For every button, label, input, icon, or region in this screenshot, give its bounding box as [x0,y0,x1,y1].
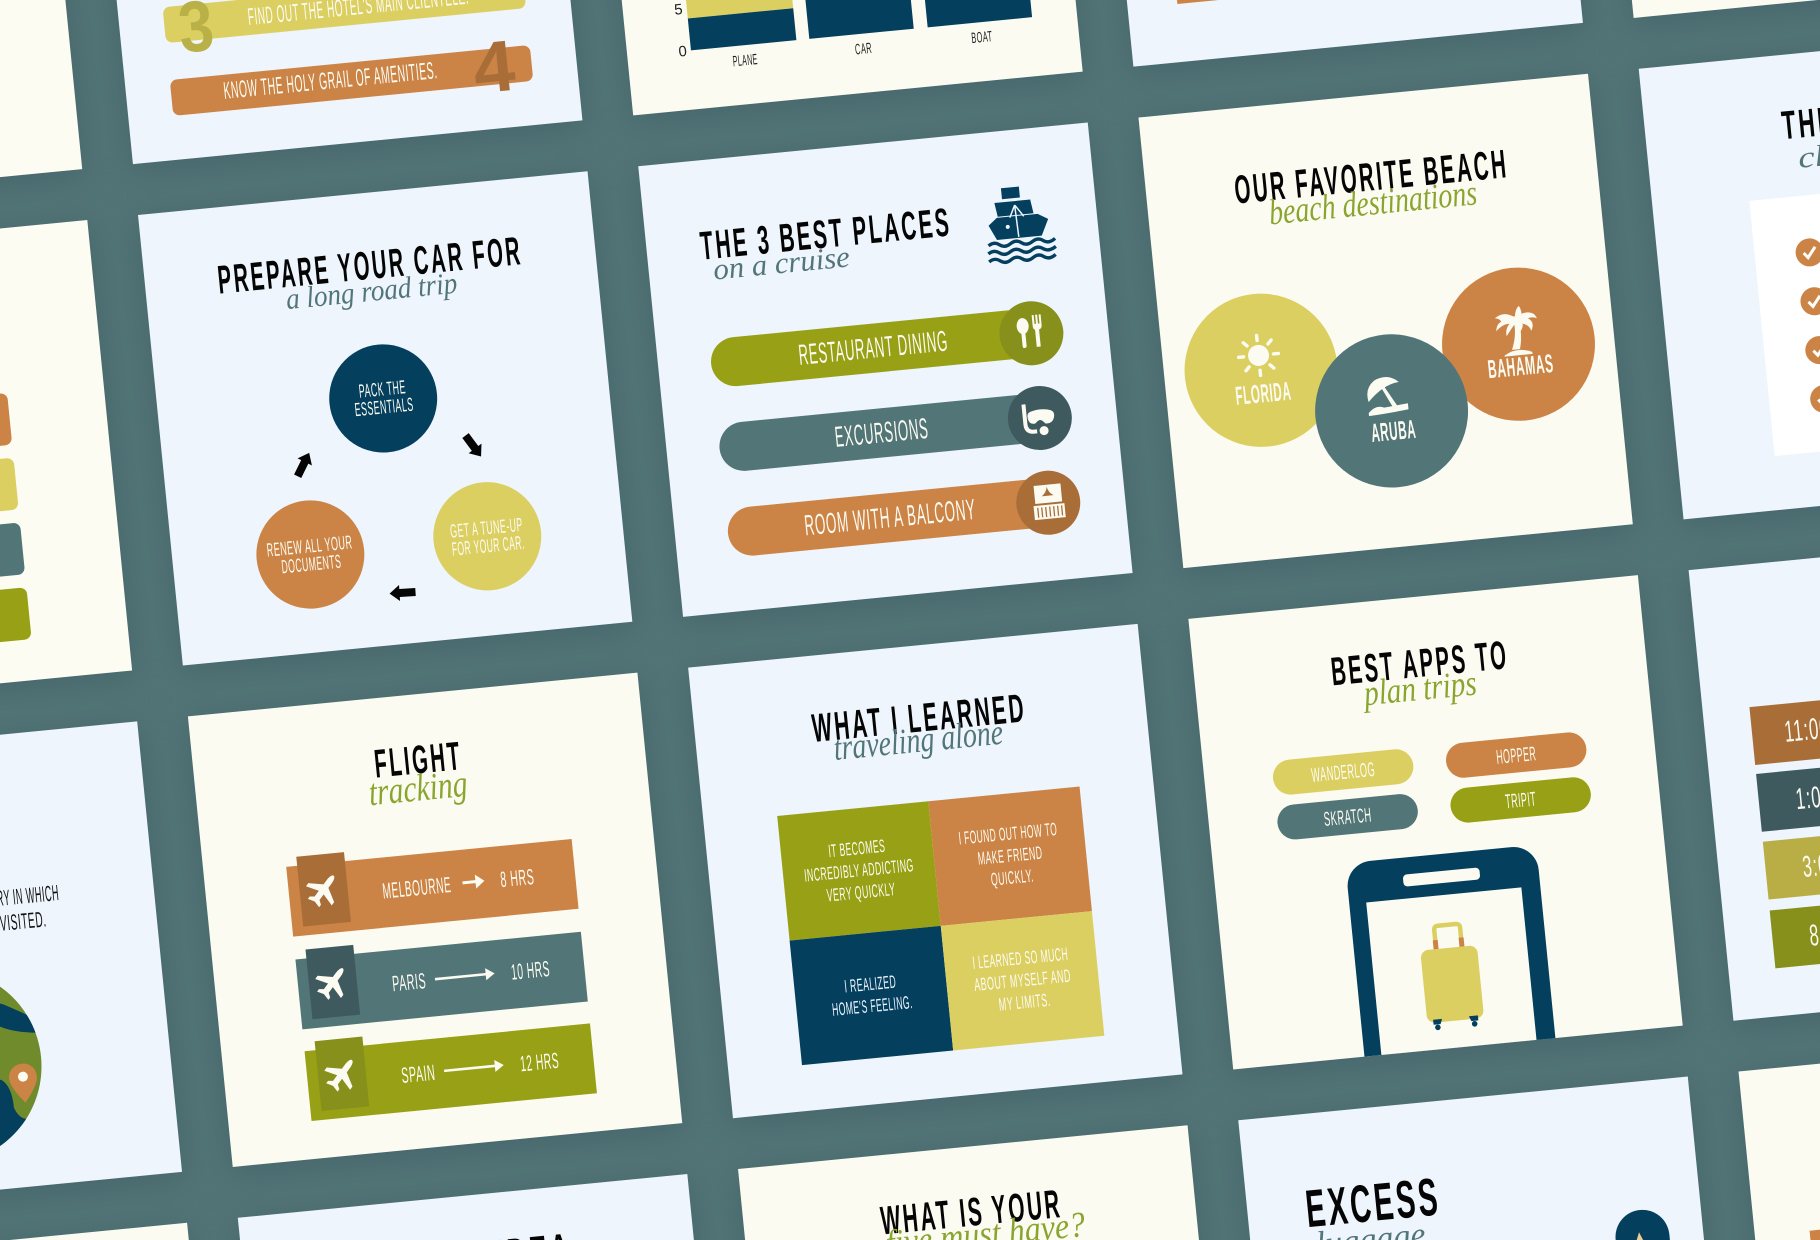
icon: navy tag with arrow [1613,1207,1676,1240]
cell: navy: HOME'S FEELING. [831,992,914,1020]
pill: skratch [1276,792,1419,841]
chart: plane car boat bars: 5 [674,1,684,19]
icon: beach umbrella [1365,375,1409,416]
panel: cream card top right [1589,0,1820,18]
row: melbourne [285,830,579,937]
cell: green: INCREDIBLY ADDICTING [803,855,915,886]
heading: WHAT I LEARNED [810,686,1028,751]
cell: yellow: I LEARNED SO MUCH [972,944,1069,973]
panel: transport bar chart [588,0,1083,115]
pill: excursions [716,383,1075,481]
icon: balcony [1032,483,1066,520]
circle: pack the essentials: PACK THE [358,377,407,403]
panel: blank cream card top left [0,0,82,213]
pill: restaurant dining [708,298,1066,396]
heading: PREPARE YOUR CAR FOR [216,229,524,303]
circle: tune-up [428,477,546,595]
pill: hopper [1444,731,1588,779]
chart: plane car boat bars: BOAT [971,28,993,47]
icon: sun [1237,334,1280,377]
chart: plane car boat bars: PLANE [732,51,758,70]
circle: renew documents: DOCUMENTS [281,552,342,578]
circle: pack the essentials: ESSENTIALS [354,395,415,421]
cell: navy [790,926,953,1065]
cell: green: IT BECOMES [827,836,886,861]
pill: room with a balcony: ROOM WITH A BALCONY [803,494,977,542]
cell: orange [928,787,1092,926]
panel: what I learned [688,624,1182,1118]
panel: coloured tabs card [0,220,132,714]
circle: renew documents: RENEW ALL YOUR [266,532,353,562]
subheading: traveling alone [832,712,1005,768]
bar: find out clientele [161,0,529,70]
cell: navy: I REALIZED [843,972,897,997]
icon: palm tree [1494,304,1540,357]
panel: hotel tips [88,0,582,164]
row: 11:00 [1749,674,1820,765]
checklist card [1749,176,1820,456]
row: spain: SPAIN [400,1060,436,1088]
pill: tripit [1449,776,1593,824]
panel: excess luggage [1238,1077,1733,1240]
row: 3:00 [1763,809,1820,900]
cell: yellow [941,911,1104,1050]
pill: tripit: TRIPIT [1504,788,1537,813]
circle: florida: FLORIDA [1234,376,1293,411]
bar: holy grail of amenities: KNOW THE HOLY GRAIL OF AMENITIES. [222,57,439,105]
cell: orange: QUICKLY. [990,866,1035,890]
panel: prepare your car [138,171,632,666]
circle: bahamas [1435,261,1602,428]
panel: beach destinations [1138,74,1633,568]
icon: snorkel mask [1023,402,1056,437]
chart: plane car boat bars: 0 [678,43,688,61]
panel: flight tracking [188,673,682,1167]
bar: holy grail of amenities [168,24,536,139]
pill: skratch: SKRATCH [1323,804,1373,831]
pill: hopper: HOPPER [1495,743,1537,769]
cell: yellow: ABOUT MYSELF AND [973,966,1072,995]
circle: bahamas: BAHAMAS [1486,348,1555,384]
row: melbourne: 8 HRS [499,864,535,892]
row: 8:00 [1770,878,1820,968]
cell: yellow: MY LIMITS. [998,990,1052,1015]
cell: green [777,801,941,941]
circle: renew documents [251,495,369,614]
cell: orange: MAKE FRIEND [977,843,1043,869]
row: paris: PARIS [391,968,427,996]
panel: daily schedule [1689,526,1820,1021]
circle: tune-up: FOR YOUR CAR. [451,533,526,561]
row: spain [304,1014,597,1121]
circle: florida [1177,287,1345,454]
pill: room with a balcony [725,468,1083,566]
row: paris [295,923,588,1029]
arrow: up right [290,449,316,480]
panel: what is your [738,1125,1232,1240]
pill: restaurant dining: RESTAURANT DINING [797,325,949,372]
row: spain: 12 HRS [519,1048,560,1076]
circle: aruba [1308,327,1475,495]
icon: phone with suitcase [1345,845,1555,1057]
cell: green: VERY QUICKLY [826,879,896,906]
row: paris: 10 HRS [510,956,551,985]
icon: globe with pin [0,986,42,1146]
subheading: tracking [367,763,469,814]
circle: tune-up: GET A TUNE-UP [449,515,524,543]
panel: blue card top with orange bar [1089,0,1583,67]
pill: wanderlog [1271,748,1415,796]
icon: ship [982,184,1057,264]
subheading: plan trips [1360,663,1478,714]
subheading: beach destinations [1267,172,1479,232]
bar: holy grail of amenities: 4 [470,25,522,109]
panel: cruise [638,122,1133,617]
circle: pack the essentials [324,339,442,458]
panel: cream card bottom left [0,1223,232,1240]
heading: FLIGHT [372,734,464,787]
pill: excursions: EXCURSIONS [833,413,930,454]
heading: THE 3 BEST PLACES [698,200,953,269]
subheading: on a cruise [712,240,851,287]
subheading: a long road trip [284,267,459,316]
panel: map and globe [0,721,182,1216]
cell: orange: I FOUND OUT HOW TO [958,819,1058,849]
circle: aruba: ARUBA [1370,414,1417,448]
pill: wanderlog: WANDERLOG [1310,759,1376,787]
chart: plane car boat bars [666,0,1034,76]
panel: checklist [1639,25,1820,519]
panel: cream card bottom right [1738,1028,1820,1240]
heading: OUR FAVORITE BEACH [1232,142,1510,213]
row: 1:00 [1756,741,1820,832]
arrow: left [389,584,416,602]
panel: travel idea [238,1174,732,1240]
body text [0,880,63,942]
arrow: down right [459,431,487,461]
chart: plane car boat bars: CAR [854,40,873,58]
icon: fork and spoon [1016,314,1044,349]
panel: best apps [1188,575,1683,1069]
heading: EXCESS [1303,1167,1443,1239]
heading: BEST APPS TO [1329,633,1510,694]
row: melbourne: MELBOURNE [381,872,452,904]
